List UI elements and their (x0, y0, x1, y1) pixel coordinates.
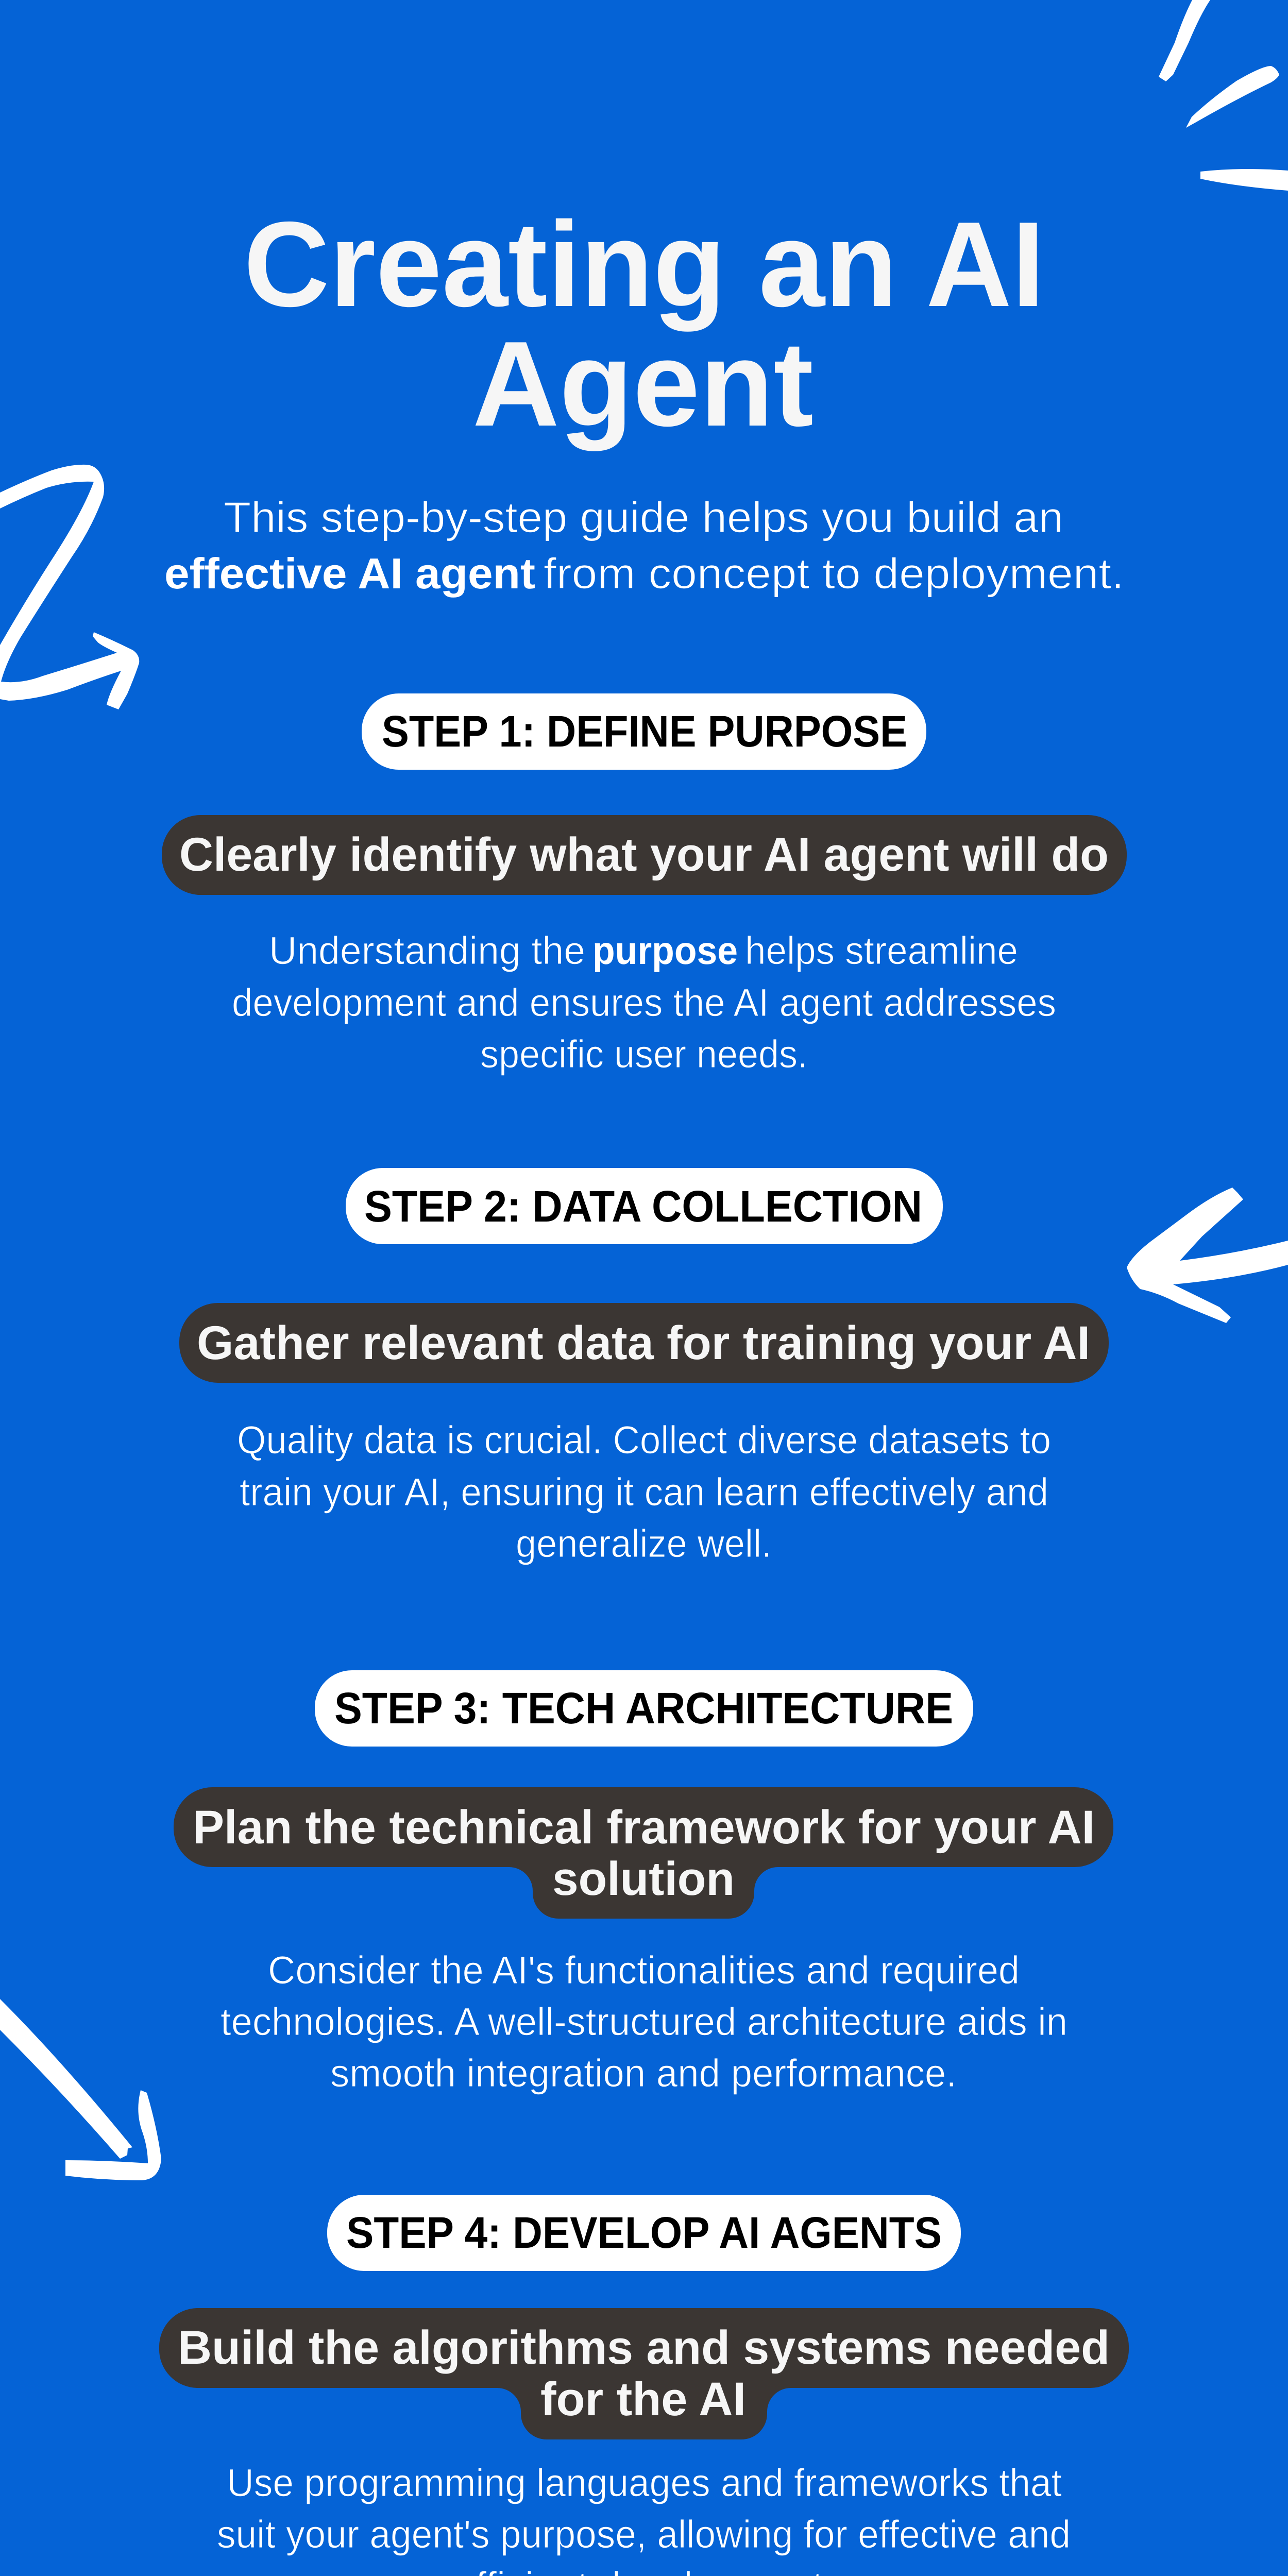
step 4 description (217, 2461, 1071, 2576)
step 3 label pill (315, 1670, 973, 1747)
step 1 heading (162, 815, 1127, 895)
step 4 heading: Build the algorithms and systems needed (178, 2321, 1110, 2374)
panel: step 3 (174, 1670, 1113, 2095)
step 3 heading: Plan the technical framework for your AI (193, 1801, 1095, 1854)
step 4 description: Use programming languages and frameworks that (227, 2461, 1062, 2505)
step 2 description: train your AI, ensuring it can learn effectively and (240, 1470, 1048, 1514)
panel: step 4 (159, 2195, 1129, 2576)
step 2 heading: Gather relevant data for training your AI (197, 1317, 1090, 1369)
step 4 description: suit your agent's purpose, allowing for effective and (217, 2513, 1071, 2556)
icon: brush arrow pointing down-right at step 3 (0, 1999, 161, 2180)
step 1 heading: Clearly identify what your AI agent will do (179, 828, 1109, 881)
step 1 description: purpose (592, 929, 738, 973)
panel: step 2 (179, 1168, 1109, 1566)
icon: brush arrow pointing left at step 2 (1127, 1188, 1288, 1323)
step 4 label pill (327, 2195, 961, 2271)
step 1 description: development and ensures the AI agent addresses (232, 981, 1056, 1025)
step 3 heading (174, 1787, 1113, 1919)
title: Agent (472, 316, 814, 451)
subtitle (164, 493, 1124, 598)
step 1 description (232, 929, 1056, 1076)
step 2 heading (179, 1303, 1109, 1383)
subtitle: This step-by-step guide helps you build an (224, 493, 1063, 541)
icon: brush marks top right (1159, 0, 1288, 191)
subtitle: from concept to deployment. (544, 549, 1124, 598)
step 4 label pill: STEP 4: DEVELOP AI AGENTS (346, 2208, 942, 2258)
step 1 description: helps streamline (745, 929, 1018, 973)
step 2 description: generalize well. (516, 1522, 772, 1566)
step 3 description (221, 1948, 1067, 2095)
icon: swirl arrow left of the subtitle (0, 465, 139, 709)
step 1 description: Understanding the (269, 929, 585, 973)
step 3 description: technologies. A well-structured architecture aids in (221, 2000, 1067, 2044)
step 2 description (237, 1418, 1051, 1566)
step 4 heading: for the AI (540, 2373, 746, 2426)
step 1 label pill (362, 693, 926, 770)
step 1 description: specific user needs. (480, 1032, 808, 1076)
panel: step 1 (162, 693, 1127, 1076)
step 3 label pill: STEP 3: TECH ARCHITECTURE (334, 1684, 953, 1733)
step 3 description: Consider the AI's functionalities and required (268, 1948, 1020, 1992)
title: Creating an AI (244, 196, 1045, 332)
step 2 label pill (346, 1168, 943, 1244)
step 2 description: Quality data is crucial. Collect diverse datasets to (237, 1418, 1051, 1462)
step 4 heading (159, 2308, 1129, 2439)
step 1 label pill: STEP 1: DEFINE PURPOSE (382, 707, 907, 756)
title (244, 196, 1045, 451)
step 3 heading: solution (552, 1853, 735, 1905)
step 2 label pill: STEP 2: DATA COLLECTION (364, 1182, 922, 1231)
step 3 description: smooth integration and performance. (330, 2052, 957, 2095)
subtitle: effective AI agent (164, 549, 535, 598)
